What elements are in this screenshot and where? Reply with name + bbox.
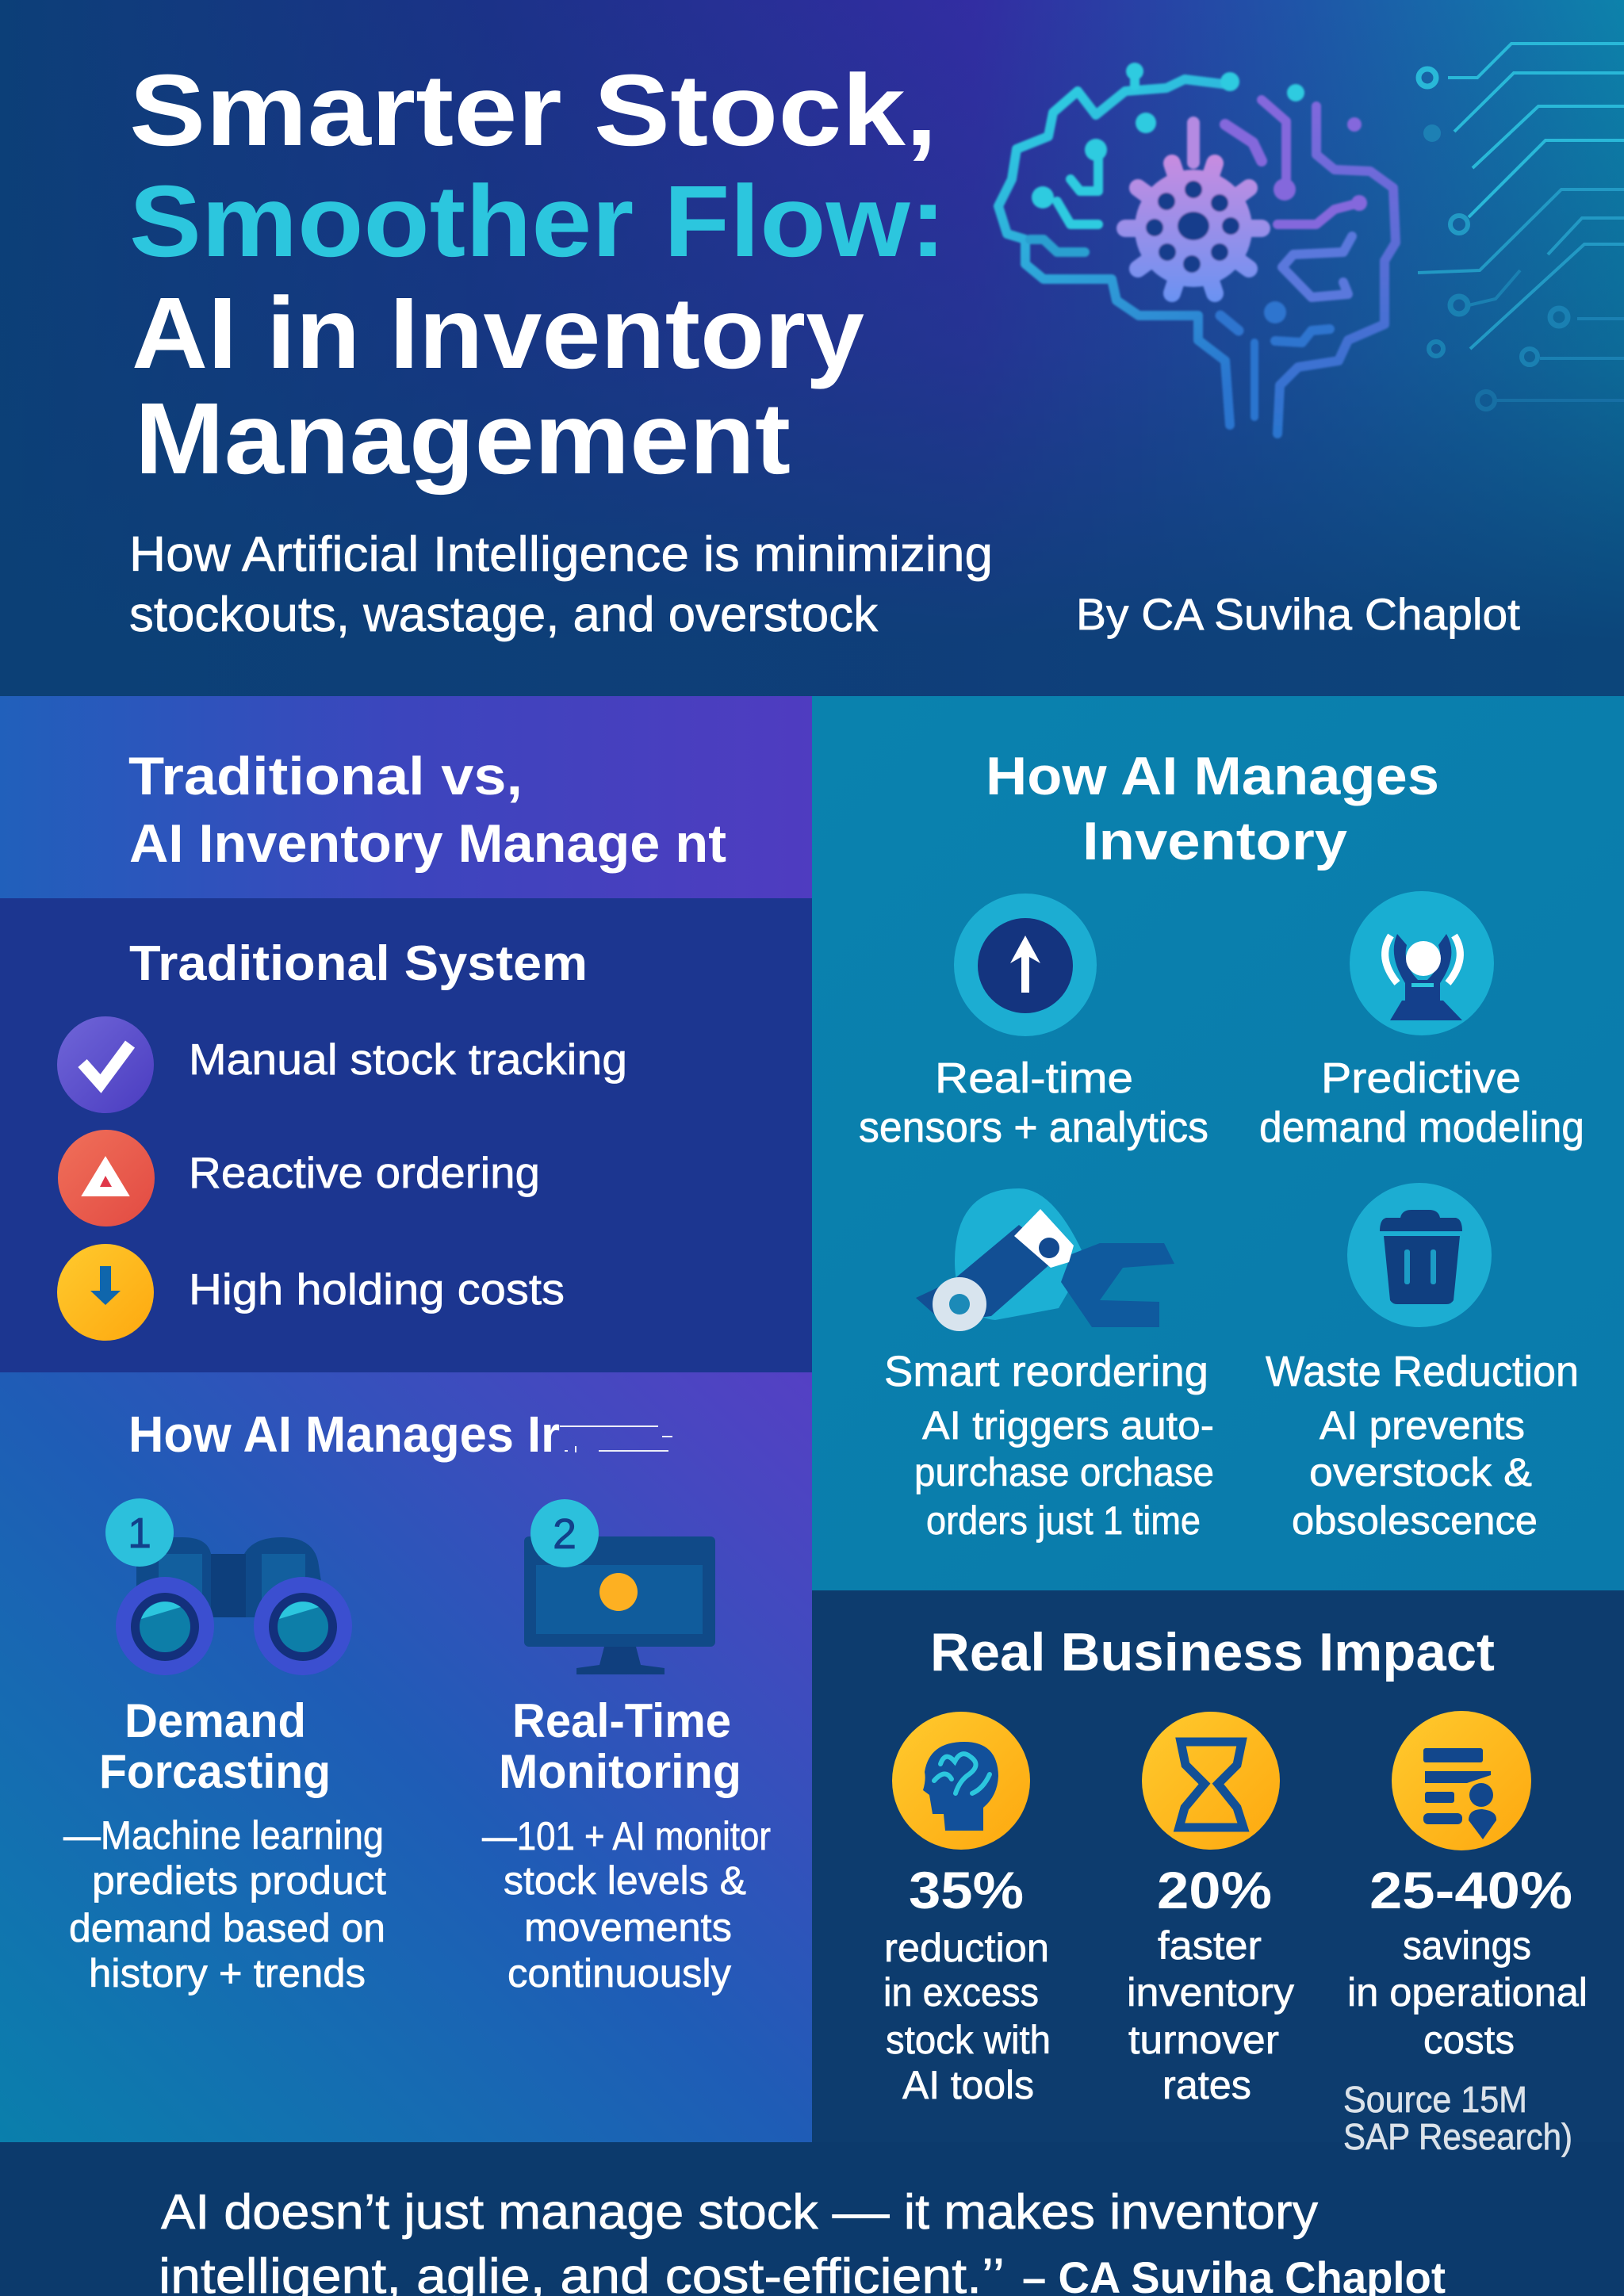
heading: how AI manages inventory: Inventory (1082, 811, 1347, 871)
text: predictive demand modeling: demand modeling (1259, 1104, 1584, 1151)
icon: binoculars (116, 1537, 352, 1675)
title (129, 54, 946, 496)
stat: 20 percent: turnover (1128, 2018, 1279, 2062)
stat: 25-40 percent (1347, 1861, 1588, 2062)
item: high holding costs: High holding costs (189, 1265, 565, 1314)
stat: 25-40 percent: 25-40% (1369, 1861, 1572, 1919)
text: demand forecasting (63, 1694, 386, 1996)
panel: traditional vs AI heading: Traditional vs, (128, 746, 523, 806)
text: real-time monitoring: continuously (508, 1951, 731, 1996)
text: demand forecasting: —Machine learning (63, 1813, 384, 1858)
text: waste reduction: overstock & (1309, 1450, 1532, 1494)
text: waste reduction: Waste Reduction (1266, 1348, 1579, 1395)
stat: 25-40 percent: costs (1423, 2018, 1515, 2062)
text: real-time monitoring: stock levels & (504, 1858, 746, 1903)
subtitle: stockouts, wastage, and overstock (129, 587, 879, 642)
icon: warning triangle (58, 1130, 155, 1226)
text: demand forecasting: history + trends (89, 1951, 366, 1996)
text: real-time monitoring (482, 1694, 771, 1996)
stat: 35 percent: AI tools (902, 2063, 1034, 2107)
stat: 20 percent: rates (1162, 2063, 1251, 2107)
title: Smoother Flow: (129, 165, 946, 278)
source note: Source 15M (1343, 2079, 1527, 2120)
stat: 20 percent: 20% (1157, 1861, 1272, 1919)
text: demand forecasting: Forcasting (99, 1745, 331, 1798)
stat: 35 percent (883, 1861, 1051, 2107)
icon: predictive lightbulb (1350, 891, 1494, 1035)
icon: AI brain with gear (998, 63, 1396, 434)
icon: check mark (57, 1016, 154, 1113)
stat: 20 percent: faster (1158, 1923, 1262, 1968)
text: real-time sensors (859, 1054, 1208, 1151)
icon: hourglass (1142, 1712, 1280, 1850)
text: predictive demand modeling: Predictive (1321, 1054, 1521, 1102)
badge: number 1 (105, 1498, 174, 1567)
subtitle (129, 527, 993, 642)
badge: number 2 (530, 1499, 599, 1567)
stat: 20 percent: inventory (1127, 1970, 1294, 2015)
author byline: By CA Suviha Chaplot (1076, 589, 1520, 639)
badge: number 1: 1 (128, 1510, 151, 1557)
decorative circuit traces (1418, 44, 1624, 409)
heading: how AI manages inventory: How AI Manages (986, 746, 1439, 806)
closing quote (159, 2185, 1446, 2296)
text: real-time monitoring: movements (524, 1905, 732, 1950)
heading: how AI manages: How AI Manages Ir (128, 1406, 560, 1463)
panel: traditional vs AI heading: AI Inventory Manage nt (129, 813, 726, 874)
icon: gear (1125, 163, 1262, 293)
text: real-time monitoring: Real-Time (512, 1694, 731, 1747)
source note: SAP Research) (1343, 2116, 1572, 2157)
text: real-time sensors: sensors + analytics (859, 1104, 1208, 1151)
heading: how AI manages inventory (986, 746, 1439, 871)
stat: 25-40 percent: savings (1403, 1923, 1531, 1968)
text: real-time monitoring: Monitoring (499, 1745, 741, 1798)
panel: how AI manages inventory, left (0, 1372, 812, 2142)
text: demand forecasting: demand based on (69, 1906, 385, 1950)
stat: 35 percent: reduction (884, 1926, 1049, 1970)
heading: traditional system: Traditional System (129, 936, 588, 991)
text: demand forecasting: Demand (124, 1694, 306, 1747)
text: real-time sensors: Real-time (935, 1054, 1133, 1102)
icon: monitor (524, 1536, 715, 1674)
header background (0, 0, 1624, 696)
text: smart reordering: orders just 1 time (926, 1498, 1201, 1543)
icon: down arrow (57, 1244, 154, 1341)
stat: 35 percent: in excess (883, 1970, 1039, 2015)
panel: traditional system (0, 898, 812, 1372)
text: smart reordering: AI triggers auto- (922, 1403, 1214, 1448)
text: real-time monitoring: —101 + AI monitor (482, 1814, 771, 1858)
panel: real business impact (812, 1590, 1624, 2157)
text: smart reordering: Smart reordering (884, 1348, 1208, 1395)
text: waste reduction (1266, 1348, 1579, 1543)
icon: operational list (1392, 1711, 1531, 1850)
icon: head with brain (892, 1712, 1030, 1850)
text: waste reduction: obsolescence (1292, 1498, 1538, 1543)
source note (1343, 2079, 1572, 2157)
icon: robotic arm (916, 1188, 1174, 1331)
stat: 20 percent (1127, 1861, 1294, 2107)
title: Management (135, 382, 791, 496)
text: waste reduction: AI prevents (1320, 1403, 1525, 1448)
title: AI in Inventory (132, 277, 864, 390)
badge: number 2: 2 (553, 1510, 576, 1558)
panel: traditional vs AI heading (0, 696, 812, 898)
closing quote: AI doesn’t just manage stock –– it makes inventory (161, 2185, 1318, 2240)
icon: waste bin (1347, 1183, 1492, 1327)
stat: 25-40 percent: in operational (1347, 1970, 1588, 2015)
item: reactive ordering: Reactive ordering (189, 1148, 540, 1197)
text: smart reordering: purchase orchase (914, 1450, 1214, 1494)
heading: real business impact: Real Business Impact (930, 1622, 1495, 1682)
panel: how AI manages inventory, right (812, 696, 1624, 1590)
subtitle: How Artificial Intelligence is minimizing (129, 527, 993, 582)
stat: 35 percent: 35% (909, 1861, 1024, 1919)
title: Smarter Stock, (129, 54, 937, 167)
icon: real-time arrow (954, 894, 1097, 1036)
text: smart reordering (884, 1348, 1214, 1543)
stat: 35 percent: stock with (886, 2018, 1051, 2062)
item: manual stock tracking: Manual stock tracking (189, 1035, 627, 1084)
text: demand forecasting: prediets product (92, 1858, 386, 1903)
bottom background band (0, 2142, 1624, 2296)
text: predictive demand modeling (1259, 1054, 1584, 1151)
